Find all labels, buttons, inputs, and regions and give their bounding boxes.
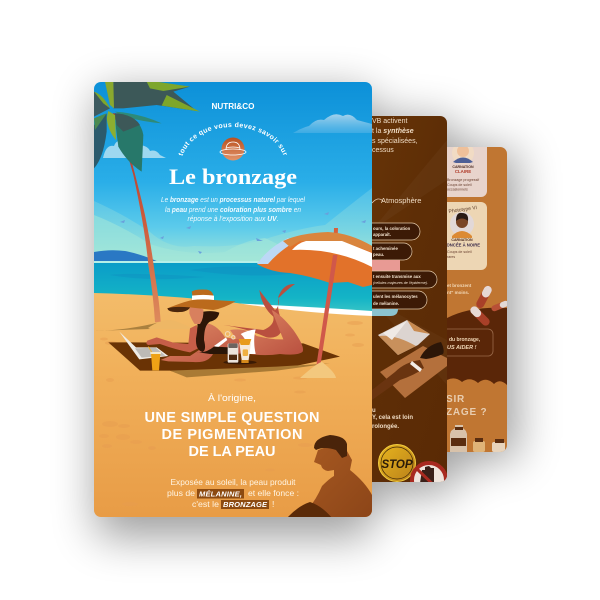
bow: [225, 332, 230, 336]
text: cela est loin: rolongée.: [372, 424, 399, 430]
pill: acheminee: [372, 242, 412, 260]
heading: DE LA PEAU: [188, 444, 276, 460]
trunk: [113, 113, 161, 322]
heading: [144, 410, 320, 460]
logo: NUTRI&CO: [212, 102, 254, 111]
card: carnation claire: Coups de soleil: [447, 183, 472, 187]
bikini top: [214, 337, 227, 347]
icon: capsules: [470, 286, 507, 326]
sea: [94, 263, 372, 311]
towel: [108, 342, 340, 372]
callout: pour aider: US AIDER !: [447, 345, 477, 351]
intro paragraph: Le bronzage est un processus naturel par lequel: [161, 195, 305, 204]
hills: [94, 188, 372, 253]
closing paragraph: plus de: [167, 488, 195, 498]
title: Le bronzage: [169, 164, 297, 189]
white foam: [240, 304, 372, 316]
illustration: sunbather from above: [372, 320, 447, 400]
distant island: [94, 250, 156, 261]
dark brown wave band: [447, 308, 507, 385]
subheading: À l'origine,: [208, 393, 256, 404]
text: bronzent moins: et bronzent: [447, 283, 472, 288]
highlight: melanine: MÉLANINE,: [199, 490, 242, 498]
panel: front card: [94, 82, 372, 517]
intro paragraph: réponse à l'exposition aux UV.: [188, 214, 278, 223]
card: carnation foncee a noire: CARNATION: [451, 238, 473, 242]
pill: transmise: (cellules majeures de l'épiderme).: [373, 281, 428, 285]
card: carnation foncee a noire: FONCÉE À NOIRE: [444, 242, 480, 248]
card: carnation foncee a noire: Coups de soleil: [447, 250, 472, 254]
text: UVB intro: s spécialisées,: [372, 138, 418, 145]
pill: acheminee: peau.: [373, 252, 384, 257]
pill: melanocytes: ulent les mélanocytes: [373, 294, 418, 299]
torso and arms: [161, 323, 247, 362]
lower fronds: [115, 112, 162, 123]
card: carnation foncee a noire: [447, 202, 487, 270]
pill: transmise: t ensuite transmise aux: [373, 274, 421, 279]
laptop: [119, 332, 168, 359]
skin layers graphic: [372, 260, 400, 271]
pill: transmise: [372, 270, 438, 288]
hat: [167, 290, 236, 312]
birds: [120, 212, 366, 254]
icon: parasol: [257, 228, 372, 368]
cloud left: [103, 141, 166, 158]
text: UVB intro: t la synthèse: [372, 128, 414, 135]
icon: no hand sign: [410, 461, 447, 482]
card: carnation claire: Bronzage progressif: [447, 178, 479, 182]
icon: palm tree: [94, 82, 200, 322]
hair: [196, 311, 219, 352]
heading: choisir bronzage: SIR: [446, 394, 465, 405]
arc heading: tout ce que vous devez savoir sur: [178, 122, 287, 156]
sunscreen tube: [239, 343, 251, 360]
pill: la coloration apparait: [372, 222, 420, 240]
pill: acheminee: t acheminée: [373, 246, 398, 251]
bikini bottom: [241, 329, 256, 354]
text: cela est loin: [372, 408, 413, 430]
sunscreen jar: [228, 343, 238, 363]
text: cela est loin: Y, cela est loin: [372, 415, 413, 421]
text: UVB intro: cessus: [372, 147, 394, 154]
heading: UNE SIMPLE QUESTION: [144, 410, 320, 426]
card: carnation claire: [447, 147, 487, 197]
palm shadow and mound: [96, 322, 158, 331]
card: carnation claire: occasionnels: [447, 188, 468, 192]
icon: stop sign: STOP: [381, 459, 413, 471]
label: atmosphere: [372, 198, 422, 204]
upper fronds: [113, 82, 197, 111]
drop shadow behind the cards: [96, 92, 517, 537]
illustration: woman on towel: [108, 284, 340, 377]
text: bronzent moins: nt" moins.: [447, 290, 469, 295]
card: carnation claire: CARNATION: [452, 165, 474, 169]
pill: la coloration apparait: ours, la coloration: [373, 226, 411, 231]
icon: product jars: [450, 425, 505, 452]
heading: choisir bronzage: [447, 395, 486, 415]
closing paragraph: et elle fonce :: [248, 488, 299, 498]
label: atmosphere: Atmosphère: [381, 196, 421, 205]
icon: sun hat: [220, 138, 246, 160]
product shadow: [223, 360, 257, 364]
pill: melanocytes: de mélanine.: [373, 301, 399, 306]
text: cela est loin: u: [372, 408, 376, 414]
closing paragraph: !: [272, 499, 274, 509]
face: [189, 307, 203, 324]
sky: [94, 82, 372, 264]
card: carnation foncee a noire: rares: [447, 255, 455, 259]
heading: choisir bronzage: ZAGE ?: [446, 407, 487, 418]
intro paragraph: la peau prend une coloration plus sombre en: [165, 205, 301, 214]
panel: middle card: [372, 116, 447, 482]
highlight: bronzage: BRONZAGE: [223, 500, 268, 509]
callout: pour aider: du bronzage,: [449, 337, 481, 343]
intro paragraph: [161, 195, 305, 223]
pill: melanocytes: [372, 290, 428, 310]
panel: back card: [447, 147, 507, 452]
text: UVB intro: VB activent: [372, 118, 407, 125]
icon: stop sign: [378, 444, 416, 482]
card: carnation claire: CLAIRE: [455, 169, 471, 174]
text: UVB intro: [372, 118, 418, 154]
icon: man silhouette: [287, 435, 372, 518]
callout: pour aider: [447, 328, 494, 356]
pill: la coloration apparait: apparaît.: [373, 232, 391, 237]
text: bronzent moins: [447, 284, 472, 294]
juice glass: [151, 354, 160, 370]
cloud right: [293, 114, 372, 133]
beach: [94, 293, 372, 517]
sand speckles: [100, 321, 364, 392]
heading: DE PIGMENTATION: [162, 427, 302, 443]
closing paragraph: Exposée au soleil, la peau produit: [170, 477, 296, 487]
left fronds: [94, 92, 110, 117]
closing paragraph: c'est le: [192, 499, 219, 509]
mound at parasol base: [300, 362, 336, 378]
closing paragraph: [167, 477, 299, 509]
legs: [223, 284, 295, 338]
card: carnation foncee a noire: Phototype VI: [448, 205, 477, 215]
